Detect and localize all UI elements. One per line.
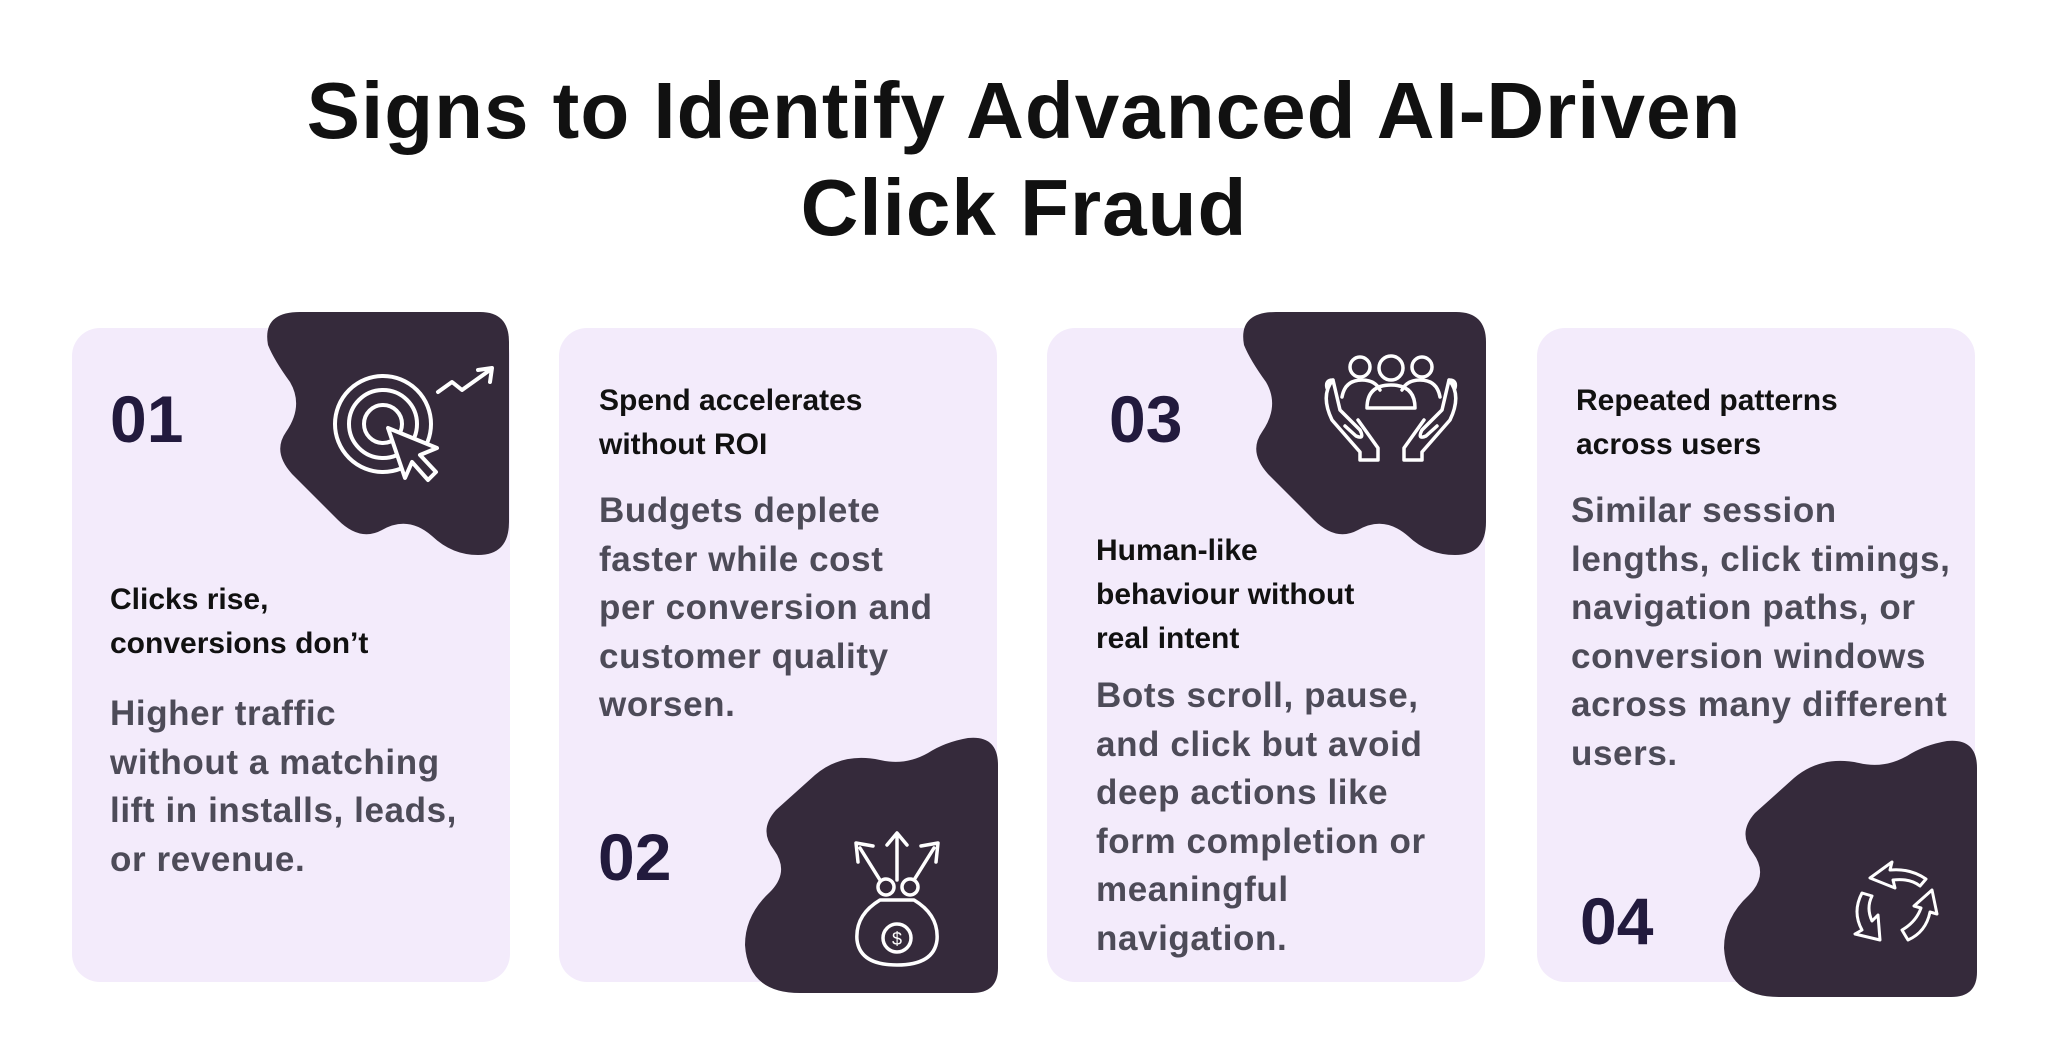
title [307, 66, 1741, 252]
card 4 number: 04 [1580, 884, 1653, 958]
card 3 body: navigation. [1096, 919, 1287, 958]
title: Click Fraud [801, 163, 1247, 252]
blob: card 3 [1243, 312, 1486, 555]
card 2 heading [598, 384, 862, 461]
card 4 body: lengths, click timings, [1571, 540, 1950, 579]
panel: card 2 [559, 328, 997, 982]
card 2 body: faster while cost [599, 540, 883, 579]
card 3 body: and click but avoid [1096, 725, 1422, 764]
card 4 body: navigation paths, or [1571, 588, 1916, 627]
card 2 heading: Spend accelerates [599, 384, 862, 417]
card 3 body [1096, 676, 1426, 958]
icon: people in hands [1326, 356, 1456, 460]
card 1 heading: Clicks rise, [110, 583, 268, 616]
card 3 body: Bots scroll, pause, [1096, 676, 1419, 715]
title: Signs to Identify Advanced AI-Driven [307, 66, 1741, 155]
card 3 heading [1096, 534, 1354, 655]
card 4 heading [1576, 384, 1838, 461]
card 3 heading: Human-like [1096, 534, 1258, 567]
card 4 body: across many different [1571, 685, 1947, 724]
card 3 heading: real intent [1096, 622, 1239, 655]
icon: cycle arrows [1855, 862, 1937, 940]
panel: card 3 [1047, 328, 1485, 982]
card 1 body: lift in installs, leads, [110, 791, 457, 830]
card 2 body: customer quality [599, 637, 889, 676]
card 2 number: 02 [598, 820, 671, 894]
card 4 heading: Repeated patterns [1576, 384, 1838, 417]
card 1 body: without a matching [110, 743, 440, 782]
card 4 body: Similar session [1571, 491, 1837, 530]
blob: card 1 [267, 312, 509, 555]
icon: money bag with arrows: $ [892, 929, 902, 949]
icon: target with cursor and trend arrow [335, 368, 492, 480]
card 3 number: 03 [1109, 382, 1182, 456]
card 1 heading: conversions don’t [110, 627, 368, 660]
card 2 body: per conversion and [599, 588, 933, 627]
panel: card 1 [72, 328, 510, 982]
card 2 body: worsen. [599, 685, 735, 724]
card 1 number: 01 [110, 382, 183, 456]
blob: card 2 [745, 738, 998, 993]
blob: card 4 [1724, 741, 1977, 997]
card 2 heading: without ROI [599, 428, 767, 461]
card 4 body: users. [1571, 734, 1678, 773]
card 4 body [1571, 491, 1950, 773]
card 3 body: meaningful [1096, 870, 1289, 909]
card 3 body: form completion or [1096, 822, 1426, 861]
card 3 body: deep actions like [1096, 773, 1388, 812]
card 2 body [598, 491, 933, 724]
card 4 body: conversion windows [1571, 637, 1926, 676]
card 1 body: Higher traffic [110, 694, 336, 733]
card 2 body: Budgets deplete [599, 491, 880, 530]
card 1 heading [110, 583, 368, 660]
panel: card 4 [1537, 328, 1975, 982]
icon: money bag with arrows [856, 833, 938, 965]
card 1 body [110, 694, 457, 879]
card 3 heading: behaviour without [1096, 578, 1354, 611]
card 1 body: or revenue. [110, 840, 305, 879]
card 4 heading: across users [1576, 428, 1761, 461]
